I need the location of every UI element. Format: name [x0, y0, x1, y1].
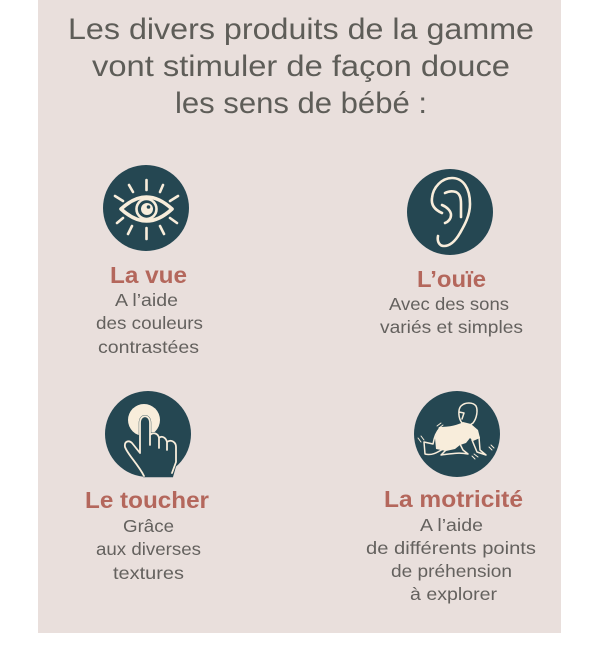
text block: [380, 294, 523, 337]
icon: eye: [103, 165, 189, 251]
heading: La vue: [110, 262, 187, 288]
title: les sens de bébé :: [175, 87, 427, 120]
icon: hand: [105, 391, 191, 477]
panel: l'ouïe: [380, 169, 523, 337]
heading: La motricité: [384, 486, 523, 512]
text block: [96, 290, 203, 357]
heading: L’ouïe: [417, 266, 486, 292]
text block: textures: [113, 563, 184, 583]
text block: aux diverses: [96, 539, 201, 559]
text block: de préhension: [391, 561, 512, 581]
text block: Avec des sons: [389, 294, 509, 314]
title: Les divers produits de la gamme: [68, 13, 534, 46]
title: vont stimuler de façon douce: [92, 50, 510, 83]
text block: variés et simples: [380, 317, 523, 337]
text block: [96, 516, 201, 583]
text block: contrastées: [98, 337, 199, 357]
panel: la vue: [96, 165, 203, 357]
text block: [366, 515, 536, 604]
panel: la motricité: [366, 391, 536, 604]
title: [68, 13, 534, 120]
text block: de différents points: [366, 538, 536, 558]
icon: ear: [407, 169, 493, 255]
text block: A l’aide: [115, 290, 178, 310]
text block: A l’aide: [420, 515, 483, 535]
text block: à explorer: [410, 584, 497, 604]
panel: le toucher: [85, 391, 209, 583]
heading: Le toucher: [85, 487, 209, 513]
text block: des couleurs: [96, 313, 203, 333]
icon: crawling baby: [414, 391, 500, 477]
text block: Grâce: [123, 516, 174, 536]
